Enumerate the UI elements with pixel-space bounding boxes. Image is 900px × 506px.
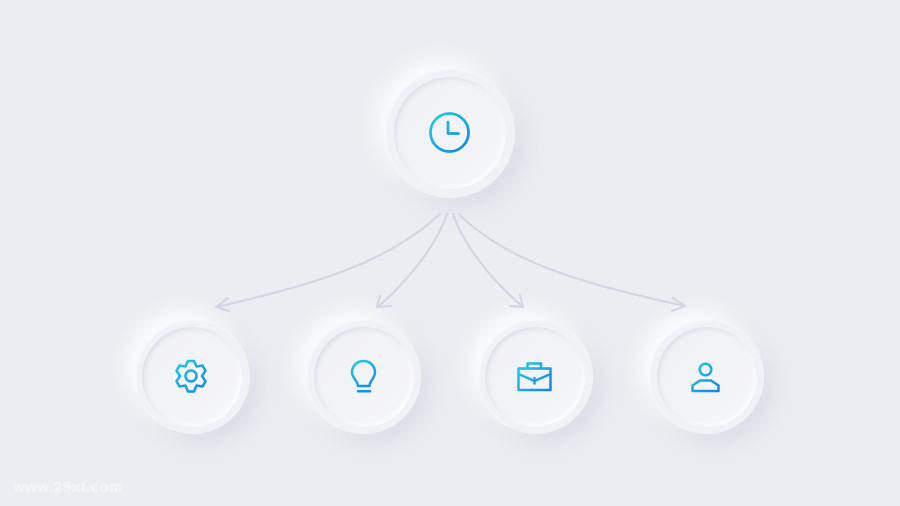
node: clock circle <box>384 68 514 198</box>
watermark: www.25xt.com <box>13 479 123 496</box>
node: light bulb circle <box>306 319 421 434</box>
icon: clock <box>430 114 468 152</box>
arrow: to gear <box>216 214 440 311</box>
node: briefcase circle <box>478 319 592 434</box>
node: person circle <box>649 319 764 434</box>
node: gear circle <box>134 319 250 434</box>
icon: gear <box>176 361 206 392</box>
arrow: to person <box>459 214 685 311</box>
arrow: to briefcase <box>453 214 523 307</box>
icon: light bulb <box>352 361 375 391</box>
arrow: to light bulb <box>377 214 447 307</box>
icon: person <box>692 364 718 391</box>
icon: briefcase <box>518 364 550 390</box>
